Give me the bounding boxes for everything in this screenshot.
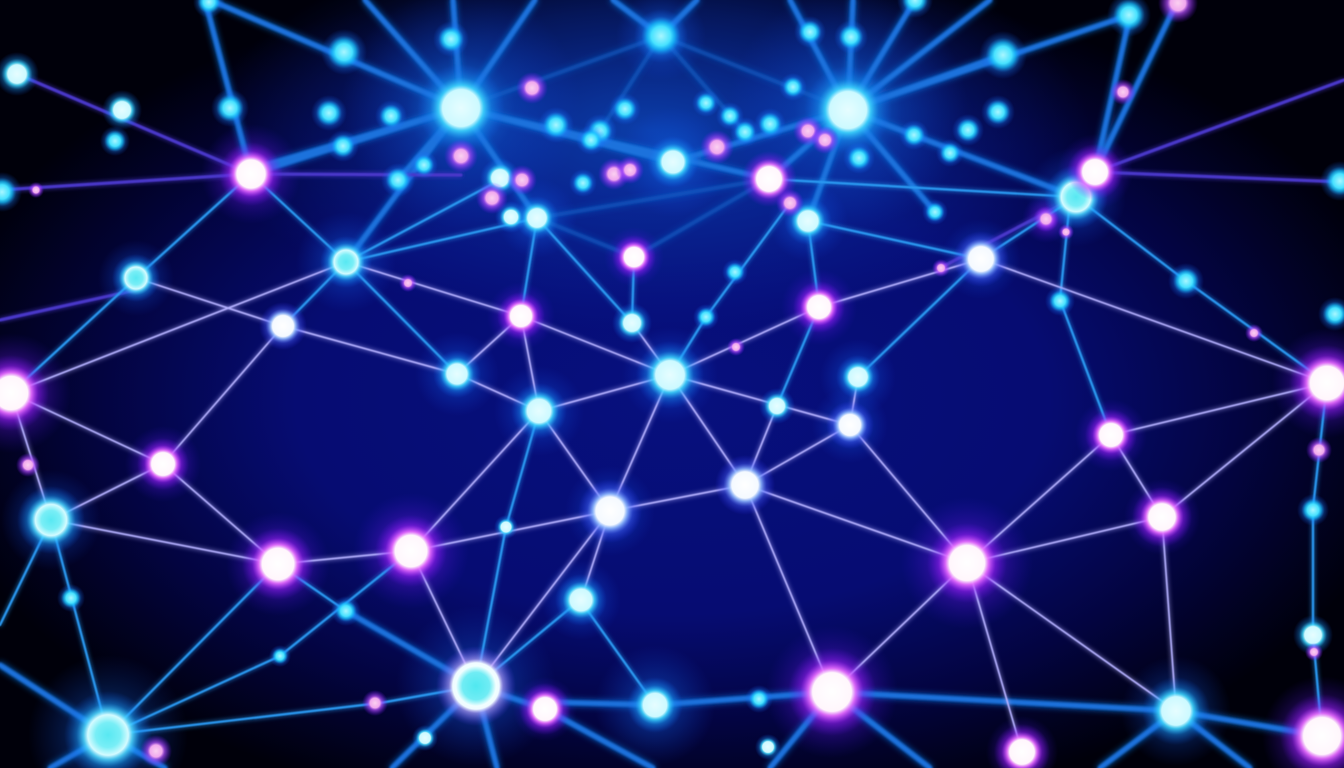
faint upper connections: [461, 36, 848, 257]
thin cyan-blue connections: [0, 174, 1327, 736]
white-blue medium nodes: [112, 231, 1009, 626]
blue haze behind upper cluster: [210, 0, 1090, 330]
purple upper connections: [0, 74, 1344, 320]
thin lilac connections: [11, 259, 1327, 752]
